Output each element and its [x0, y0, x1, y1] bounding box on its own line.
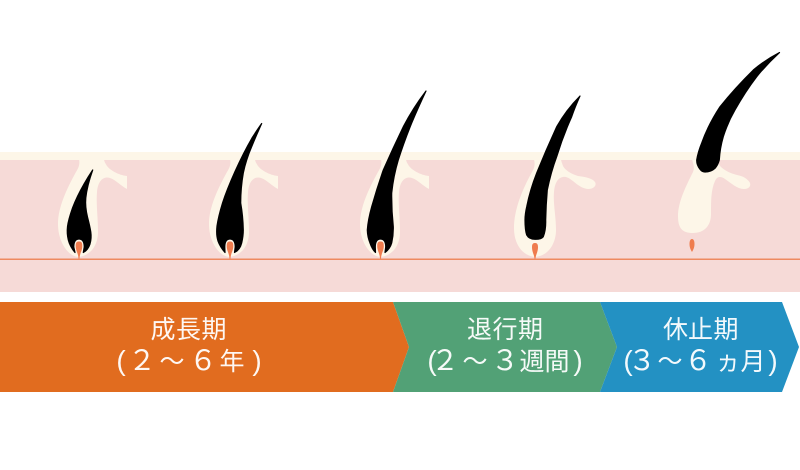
- label: telogen duration: ): [768, 345, 778, 376]
- label: anagen duration: ): [252, 345, 262, 376]
- label: catagen duration: 週: [519, 348, 545, 376]
- label: telogen duration: ６: [684, 345, 712, 376]
- follicle 1: early anagen: [58, 159, 127, 258]
- phase arrow: telogen: [600, 302, 799, 392]
- label: anagen: 成長期: [150, 316, 227, 344]
- follicle 3: full anagen: [360, 91, 429, 258]
- label: telogen duration: ３: [628, 345, 656, 376]
- hair shaft: [697, 52, 780, 172]
- label: telogen duration: 月: [740, 348, 766, 376]
- follicle 5: telogen: [678, 52, 780, 252]
- dermal papilla: [227, 242, 233, 258]
- hair shaft: [67, 170, 93, 252]
- dermis layer: [0, 160, 800, 292]
- label: telogen duration: ヵ: [715, 348, 741, 376]
- label: anagen duration: 〜: [159, 348, 185, 376]
- follicle sheath: [360, 159, 429, 257]
- panel: skin cross-section: [0, 152, 800, 292]
- dermal papilla: [76, 242, 82, 258]
- skin surface band: [0, 152, 800, 160]
- papilla base line: [0, 258, 800, 260]
- dermal papilla: [532, 243, 538, 258]
- follicle 2: anagen: [209, 124, 278, 258]
- label: telogen: 休止期: [663, 316, 739, 344]
- phase arrow: catagen: [393, 302, 617, 392]
- label: catagen duration: 間: [544, 348, 570, 376]
- follicle sheath: [209, 159, 278, 257]
- label: catagen duration: ２: [431, 345, 459, 376]
- blue arrow shape: [600, 302, 799, 392]
- dermal papilla: [377, 242, 384, 258]
- label: catagen duration: ): [573, 345, 583, 376]
- orange arrow shape: [0, 302, 409, 392]
- label: telogen duration: 〜: [657, 348, 683, 376]
- label: catagen duration: ３: [491, 345, 519, 376]
- detached papilla: [690, 239, 694, 252]
- label: anagen duration: ２: [128, 345, 156, 376]
- hair shaft: [367, 91, 426, 252]
- follicle sheath: [58, 159, 127, 257]
- hair shaft: [217, 124, 262, 252]
- label: catagen duration: 〜: [462, 348, 488, 376]
- follicle sheath: [514, 159, 596, 257]
- follicle sheath: [678, 159, 750, 233]
- label: catagen duration: (: [427, 345, 437, 376]
- label: telogen duration: (: [623, 345, 633, 376]
- label: anagen duration: (: [116, 345, 126, 376]
- hair shaft: [525, 96, 580, 239]
- label: anagen duration: ６: [189, 345, 217, 376]
- label: anagen duration: 年: [219, 348, 245, 376]
- phase arrow: anagen: [0, 302, 409, 392]
- follicle 4: catagen: [514, 96, 596, 258]
- label: catagen: 退行期: [467, 316, 543, 344]
- green arrow shape: [393, 302, 617, 392]
